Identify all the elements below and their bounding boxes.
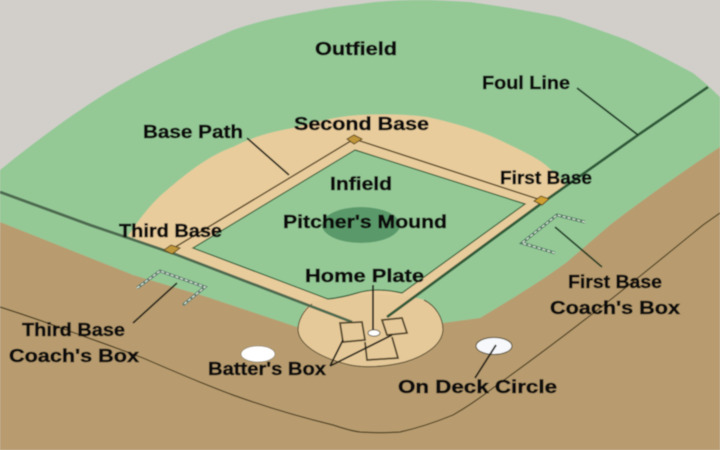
- first base: [534, 196, 549, 205]
- batter's box leaders: [330, 335, 392, 366]
- label: batter's box: Batter's Box: [208, 359, 326, 379]
- on deck circle: [476, 338, 512, 354]
- first base coach's box inner: [522, 215, 585, 253]
- label: third base: Third Base: [119, 221, 222, 241]
- label: first base coach's box: First Base: [568, 272, 662, 292]
- leader lines: [133, 88, 638, 378]
- labels: [9, 39, 680, 397]
- label: pitcher's mound: Pitcher's Mound: [283, 212, 447, 232]
- foul lines: [0, 87, 708, 322]
- third base coach's box inner: [137, 271, 205, 305]
- label: infield: Infield: [330, 174, 392, 194]
- base path lines: [172, 139, 541, 249]
- third base coach's box leader: [133, 283, 177, 323]
- right batter's box: [382, 318, 407, 335]
- label: first base: First Base: [500, 168, 592, 188]
- label: home plate: Home Plate: [305, 266, 424, 286]
- label: foul line: Foul Line: [482, 73, 570, 93]
- catcher's box: [365, 337, 398, 360]
- base path leader: [247, 138, 289, 175]
- left batter's box: [340, 322, 365, 342]
- on deck circle leader: [475, 345, 496, 378]
- pitcher's mound: [322, 207, 400, 243]
- second base: [347, 135, 362, 144]
- stands boundary curve: [0, 213, 720, 433]
- right foul line: [387, 87, 708, 317]
- label: first base coach's box: Coach's Box: [550, 298, 680, 318]
- third base: [164, 245, 180, 254]
- left foul line: [0, 192, 352, 322]
- home plate leader: [372, 285, 374, 330]
- label: second base: Second Base: [294, 114, 429, 134]
- infield dirt and base paths: [128, 114, 567, 318]
- third base coach's box: [137, 271, 205, 305]
- foul line leader: [577, 88, 638, 135]
- label: third base coach's box: Coach's Box: [9, 346, 139, 366]
- home plate dirt circle: [298, 294, 443, 367]
- label: base path: Base Path: [143, 122, 243, 142]
- foul territory dirt: [0, 147, 720, 450]
- label: on deck circle: On Deck Circle: [398, 377, 557, 397]
- home plate: [368, 330, 380, 336]
- batter's on deck circle: [241, 346, 275, 362]
- first base coach's box: [522, 215, 585, 253]
- first base coach's box leader: [555, 227, 602, 267]
- label: third base coach's box: Third Base: [22, 320, 125, 340]
- infield grass: [193, 150, 525, 299]
- label: outfield: Outfield: [315, 39, 397, 59]
- home plate dirt circle outline: [298, 300, 443, 367]
